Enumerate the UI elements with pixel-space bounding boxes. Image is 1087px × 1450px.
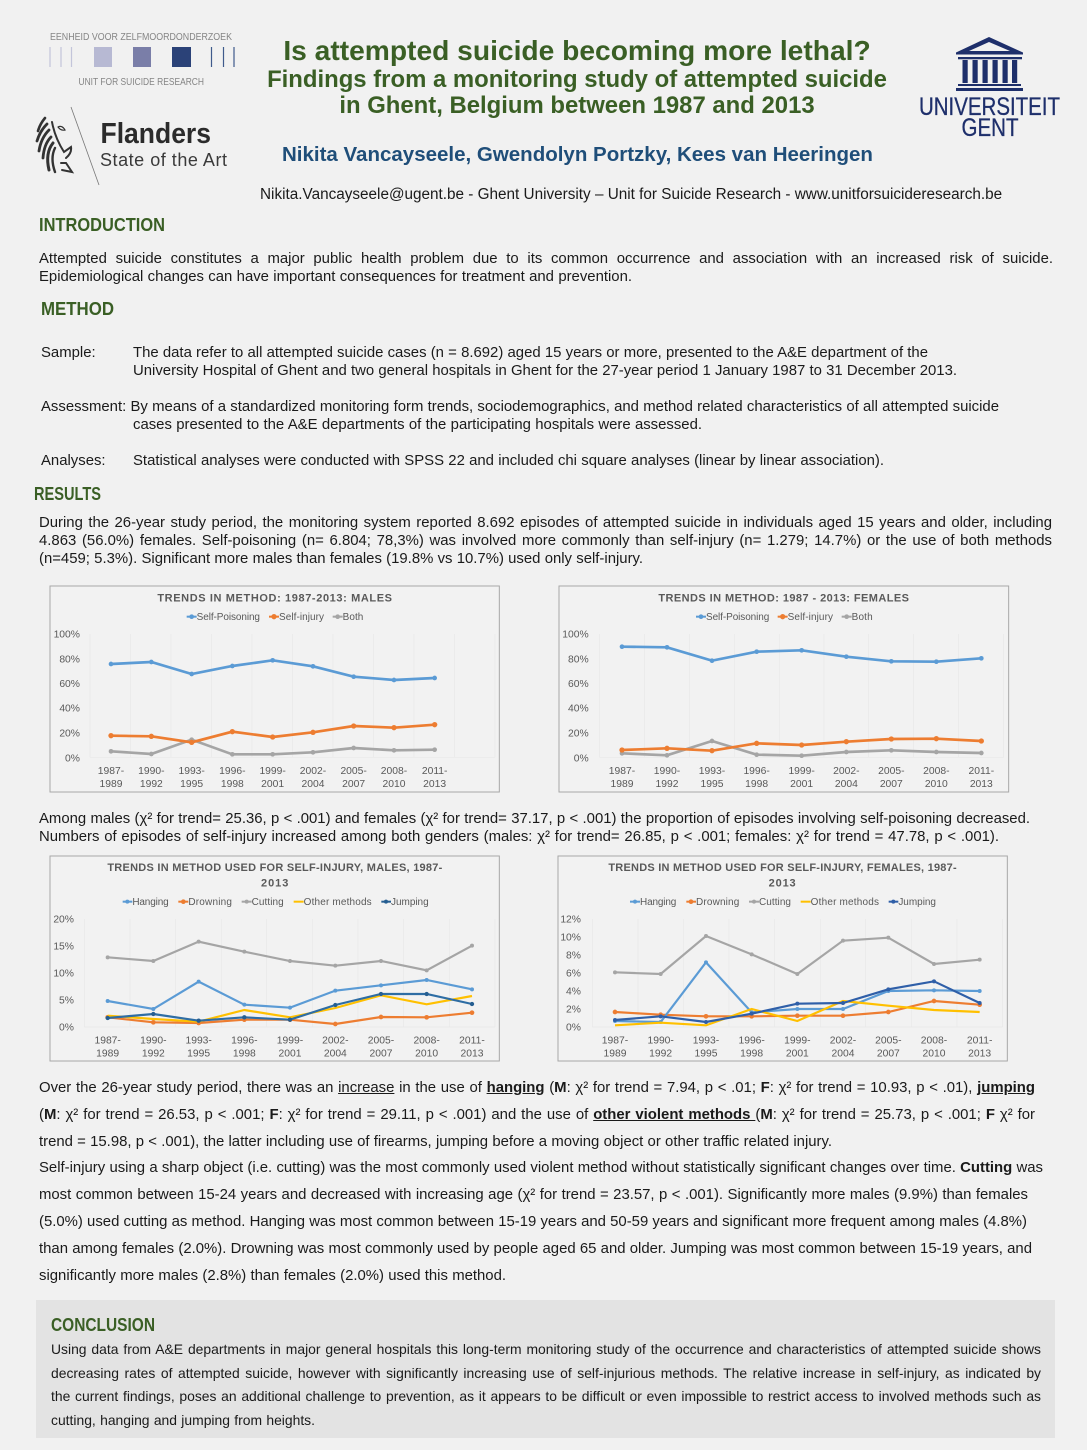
chart: self-injury methods, females: 2010: [923, 1048, 946, 1059]
chart: self-injury methods, males: 15%: [53, 942, 74, 953]
chart: trends in method, females: 1996-: [743, 766, 770, 777]
logo: unit for suicide research: EENHEID VOOR ZELFMOORDONDERZOEK: [50, 31, 232, 43]
chart: trends in method, males: 1990-: [138, 766, 165, 777]
chart: self-injury methods, males: 1998: [233, 1048, 256, 1059]
logo: Universiteit Gent: [919, 37, 1060, 142]
series: cutting: [106, 940, 474, 972]
series: drowning: [105, 1010, 474, 1026]
heading: conclusion: CONCLUSION: [51, 1315, 155, 1335]
text: conclusion: cutting, hanging and jumping from heights.: [51, 1412, 315, 1428]
series: both: [619, 739, 983, 758]
chart: trends in method, males: 1998: [221, 779, 244, 790]
chart: trends in method, males: 2008-: [381, 766, 407, 777]
chart: self-injury methods, males: 2010: [415, 1048, 438, 1059]
text: method findings over study period: most common between 15-24 years and decreased with increasing age (χ² for trend = 23.57, p < .001). Significantly more males (9.9%) than females: [39, 1187, 1028, 1203]
chart: self-injury methods, males: 5%: [59, 996, 74, 1007]
chart: self-injury methods, males: 2007: [370, 1048, 393, 1059]
logo: Flanders state of the art: Flanders: [100, 118, 211, 150]
text: method findings over study period: [39, 1080, 1043, 1284]
series: self-injury: [108, 722, 437, 745]
chart: self-injury methods, females: 2013: [968, 1048, 991, 1059]
chart: self-injury methods, males: 1989: [96, 1048, 119, 1059]
chart: self-injury methods, males: 1993-: [185, 1036, 212, 1047]
text: conclusion: the current findings, poses an additional challenge to prevention, as it appears to be difficult or even impossible to restrict access to involved methods such as: [51, 1388, 1041, 1404]
chart: trends in method, females: 2013: [969, 779, 993, 790]
chart: self-injury methods, males: 2001: [279, 1048, 302, 1059]
chart: trends in method, males: 20%: [59, 729, 80, 740]
text: method sample: University Hospital of Ghent and two general hospitals in Ghent for the 27-year period 1 January 1987 to 31 December 2013.: [133, 363, 957, 379]
text: method sample: Sample:: [41, 345, 96, 361]
chart: trends in method, males: 2005-: [340, 766, 367, 777]
chart: trends in method, females: 20%: [568, 729, 588, 740]
chart: self-injury methods, males: 1987-: [94, 1036, 121, 1047]
title: Is attempted suicide becoming more lethal?: [283, 34, 871, 66]
logo: unit for suicide research: [49, 31, 235, 88]
chart: trends in method, males: 2011-: [422, 766, 447, 777]
series: jumping: [613, 979, 982, 1024]
legend: Self-Poisoning: [706, 612, 769, 623]
chart: trends in method, males: 1993-: [178, 766, 205, 777]
chart: self-injury methods, females: 1992: [649, 1048, 672, 1059]
logo: unit for suicide research: UNIT FOR SUICIDE RESEARCH: [78, 76, 204, 88]
chart: self-injury methods, females: 2007: [877, 1048, 900, 1059]
legend: Drowning: [696, 897, 739, 908]
chart: trends in method, females: 80%: [568, 654, 588, 665]
chart: self-injury methods, females: 1989: [604, 1048, 627, 1059]
chart: self-injury methods, females: 1999-: [784, 1036, 811, 1047]
text: method findings over study period: Over the 26-year study period, there was an increase in the use of hanging (M: χ² for trend = 7.94, p < .01; F: χ² for trend = 10.93, p < .01), jumping: [39, 1080, 1035, 1096]
chart: trends in method, females: 1995: [700, 779, 723, 790]
chart: self-injury methods, females: TRENDS IN METHOD USED FOR SELF-INJURY, FEMALES, 1987-: [608, 862, 957, 874]
chart: trends in method, females: 40%: [568, 704, 588, 715]
affiliation line: Nikita.Vancayseele@ugent.be - Ghent University – Unit for Suicide Research - www.unitforsuicideresearch.be: [260, 186, 1002, 203]
legend: [187, 612, 363, 623]
chart: self-injury methods, females: 1998: [740, 1048, 763, 1059]
chart: trends in method, males: 0%: [65, 753, 80, 764]
chart: self-injury methods, males: 20%: [53, 915, 74, 926]
chart: self-injury methods, males: 1996-: [231, 1036, 258, 1047]
text: method findings over study period: than among females (2.0%). Drowning was most commonly used by people aged 65 and older. Jumping was most common between 15-19 years, and: [39, 1241, 1032, 1257]
chart: trends in method, males: 2013: [423, 779, 446, 790]
chart: self-injury methods, females: 6%: [566, 969, 581, 980]
heading: method: METHOD: [41, 299, 114, 319]
chart: self-injury methods, females: 2%: [566, 1005, 581, 1016]
text: method analyses: Analyses:: [41, 453, 106, 469]
heading: results: RESULTS: [34, 484, 101, 504]
legend: Both: [851, 612, 872, 623]
text: method assessment: Assessment: By means of a standardized monitoring form trends, sociodemographics, and method related characteristics of all attempted suicide: [41, 399, 999, 415]
legend: Drowning: [188, 897, 232, 908]
chart: trends in method, females: 0%: [573, 753, 588, 764]
chart: self-injury methods, females: 1990-: [647, 1036, 674, 1047]
chart: self-injury methods, males: TRENDS IN METHOD USED FOR SELF-INJURY, MALES, 1987-: [107, 862, 443, 874]
heading: introduction: INTRODUCTION: [39, 215, 165, 235]
legend: Self-injury: [279, 612, 324, 623]
chart: trends in method, males: 80%: [59, 654, 80, 665]
series: self-injury: [619, 736, 984, 753]
chart: self-injury methods, females: 2008-: [921, 1036, 947, 1047]
authors: Nikita Vancayseele, Gwendolyn Portzky, Kees van Heeringen: [282, 143, 873, 166]
chart: self-injury methods, females: 2011-: [967, 1036, 992, 1047]
chart: self-injury methods, males: 1990-: [140, 1036, 167, 1047]
chart: trends in method, males: 40%: [59, 704, 80, 715]
chart: self-injury methods, females: 1995: [695, 1048, 718, 1059]
chart: self-injury methods, males: 2013: [261, 878, 288, 890]
text: method findings over study period: (M: χ² for trend = 26.53, p < .001; F: χ² for trend = 29.11, p < .001) and the use of other violent methods (M: χ² for trend = 25.73, p < .001; F χ² for: [39, 1107, 1035, 1123]
text: method sample: The data refer to all attempted suicide cases (n = 8.692) aged 15 years or more, presented to the A&E department of the: [133, 345, 928, 361]
chart: trends in method, males: TRENDS IN METHOD: 1987-2013: MALES: [157, 593, 392, 605]
chart: trends in method, females: 1992: [655, 779, 678, 790]
text: results summary: (n=459; 5.3%). Significant more males than females (19.8% vs 10.7%) used only self-injury.: [39, 551, 643, 567]
chart: trends in method, males: 1992: [140, 779, 163, 790]
chart: self-injury methods, females: [558, 856, 1008, 1062]
chart: self-injury methods, females: 8%: [566, 951, 581, 962]
text: trend statistics: Among males (χ² for trend= 25.36, p < .001) and females (χ² for trend= 37.17, p < .001) the proportion of episodes involving self-poisoning decreased.: [39, 811, 1030, 827]
chart: trends in method, males: 2001: [261, 779, 284, 790]
text: conclusion: [51, 1341, 1041, 1428]
chart: self-injury methods, females: 10%: [560, 933, 581, 944]
chart: self-injury methods, males: 1995: [187, 1048, 210, 1059]
text: introduction: Epidemiological changes can have important consequences for treatment and prevention.: [39, 269, 632, 285]
series: drowning: [613, 999, 982, 1019]
chart: trends in method, females: 2011-: [968, 766, 994, 777]
chart: trends in method, females: 60%: [568, 679, 588, 690]
text: method findings over study period: trend = 15.98, p < .001), the latter including use of firearms, jumping before a moving object or other traffic related injury.: [39, 1134, 832, 1150]
legend: Self-injury: [787, 612, 833, 623]
text: introduction: Attempted suicide constitutes a major public health problem due to its common occurrence and association with an increased risk of suicide.: [39, 251, 1053, 267]
legend: [630, 897, 936, 908]
chart: self-injury methods, males: 0%: [59, 1023, 74, 1034]
series: jumping: [105, 992, 474, 1023]
title: [267, 34, 887, 119]
chart: self-injury methods, females: 2002-: [830, 1036, 856, 1047]
chart: trends in method, females: 1993-: [698, 766, 725, 777]
chart: trends in method, females: 2008-: [923, 766, 949, 777]
chart: self-injury methods, females: 12%: [560, 915, 581, 926]
chart: trends in method, females: 2001: [790, 779, 813, 790]
series: both: [109, 737, 437, 757]
series: other methods: [615, 1001, 980, 1025]
text: method findings over study period: Self-injury using a sharp object (i.e. cutting) was the most commonly used violent method without statistically significant changes over time. Cutting was: [39, 1160, 1043, 1176]
chart: self-injury methods, females: 2001: [786, 1048, 809, 1059]
text: trend statistics: Numbers of episodes of self-injury increased among both genders (males: χ² for trend= 26.85, p < .001; females: χ² for trend = 47.78, p < .001).: [39, 829, 999, 845]
chart: self-injury methods, males: 2005-: [368, 1036, 394, 1047]
chart: trends in method, females: 2005-: [878, 766, 904, 777]
chart: trends in method, males: 1996-: [219, 766, 246, 777]
text: results summary: During the 26-year study period, the monitoring system reported 8.692 episodes of attempted suicide in individuals aged 15 years and older, including: [39, 515, 1052, 531]
text: method findings over study period: (5.0%) used cutting as method. Hanging was most common between 15-19 years and 50-59 years and significant more frequent among males (4.8%): [39, 1214, 1027, 1230]
legend: Other methods: [811, 897, 879, 908]
text: method findings over study period: significantly more males (2.8%) than females (2.0%) used this method.: [39, 1268, 506, 1284]
chart: trends in method, males: 1999-: [259, 766, 286, 777]
chart: self-injury methods, males: 2008-: [413, 1036, 440, 1047]
series: hanging: [613, 960, 982, 1024]
chart: trends in method, females: 2004: [834, 779, 858, 790]
logo: Universiteit Gent: GENT: [962, 114, 1018, 142]
chart: trends in method, males: 1987-: [98, 766, 124, 777]
text: method assessment: [41, 399, 999, 433]
legend: Cutting: [759, 897, 791, 908]
chart: self-injury methods, females: 2013: [769, 878, 796, 890]
chart: trends in method, females: 1989: [610, 779, 633, 790]
chart: trends in method, females: 100%: [562, 630, 588, 641]
legend: Cutting: [252, 897, 284, 908]
chart: trends in method, males: 1989: [100, 779, 123, 790]
chart: trends in method, females: 1999-: [788, 766, 815, 777]
text: introduction: [39, 251, 1053, 285]
chart: self-injury methods, males: 2002-: [322, 1036, 349, 1047]
chart: trends in method, females: TRENDS IN METHOD: 1987 - 2013: FEMALES: [658, 593, 909, 605]
series: self-poisoning: [619, 644, 983, 664]
series: other methods: [108, 995, 472, 1022]
legend: Hanging: [132, 897, 169, 908]
legend: Self-Poisoning: [197, 612, 260, 623]
text: trend statistics: [39, 811, 1030, 845]
chart: self-injury methods, females: 4%: [566, 987, 581, 998]
chart: self-injury methods, males: 2011-: [459, 1036, 485, 1047]
logo: Flanders state of the art: State of the Art: [100, 150, 227, 170]
logo: Universiteit Gent: UNIVERSITEIT: [919, 93, 1060, 121]
chart: self-injury methods, males: 10%: [53, 969, 74, 980]
chart: self-injury methods, females: 2004: [832, 1048, 855, 1059]
text: method analyses: Statistical analyses were conducted with SPSS 22 and included chi square analyses (linear by linear association).: [133, 453, 884, 469]
chart: trends in method, males: 100%: [54, 630, 80, 641]
chart: trends in method, males: 2002-: [300, 766, 326, 777]
chart: self-injury methods, males: 2004: [324, 1048, 347, 1059]
series: hanging: [106, 978, 474, 1011]
chart: trends in method, males: 2007: [342, 779, 365, 790]
chart: trends in method, males: 2010: [383, 779, 406, 790]
chart: trends in method, females: 2007: [879, 779, 903, 790]
title: Findings from a monitoring study of attempted suicide: [267, 66, 887, 93]
chart: trends in method, females: 1987-: [608, 766, 635, 777]
text: conclusion: Using data from A&E departments in major general hospitals this long-term monitoring study of the occurrence and characteristics of attempted suicide shows: [51, 1341, 1041, 1357]
chart: self-injury methods, males: 1992: [142, 1048, 165, 1059]
text: results summary: [39, 515, 1052, 567]
text: method sample: [41, 345, 957, 379]
text: method assessment: cases presented to the A&E departments of the participating hospitals were assessed.: [133, 417, 702, 433]
chart: trends in method, males: 2004: [302, 779, 325, 790]
legend: Jumping: [898, 897, 936, 908]
series: self-poisoning: [109, 658, 437, 682]
chart: trends in method, males: 60%: [59, 679, 80, 690]
panel: conclusion: [36, 1300, 1055, 1438]
text: results summary: 4.863 (56.0%) females. Self-poisoning (n= 6.804; 78,3%) was involved more commonly than self-injury (n= 1.279; 14.7%) or the use of both methods: [39, 533, 1052, 549]
legend: Jumping: [391, 897, 429, 908]
chart: trends in method, females: 2002-: [833, 766, 859, 777]
legend: [123, 897, 429, 908]
chart: self-injury methods, females: 1987-: [602, 1036, 628, 1047]
chart: self-injury methods, females: 1996-: [738, 1036, 765, 1047]
series: cutting: [613, 934, 982, 976]
chart: trends in method, males: 1995: [180, 779, 203, 790]
text: conclusion: decreasing rates of attempted suicide, however with significantly increasing use of self-injurious methods. The relative increase in self-injury, as indicated by: [51, 1365, 1041, 1381]
legend: [696, 612, 872, 623]
chart: self-injury methods, females: 1993-: [693, 1036, 719, 1047]
chart: self-injury methods, males: 2013: [461, 1048, 484, 1059]
chart: self-injury methods, females: 0%: [566, 1023, 581, 1034]
legend: Other methods: [304, 897, 372, 908]
logo: Flanders state of the art: [36, 106, 227, 186]
legend: Both: [343, 612, 363, 623]
chart: trends in method, females: 1998: [745, 779, 768, 790]
chart: self-injury methods, females: 2005-: [875, 1036, 902, 1047]
chart: trends in method, females: [558, 586, 1010, 792]
chart: self-injury methods, males: [50, 856, 500, 1062]
chart: trends in method, females: 1990-: [653, 766, 680, 777]
title: in Ghent, Belgium between 1987 and 2013: [339, 92, 815, 119]
chart: self-injury methods, males: 1999-: [277, 1036, 303, 1047]
chart: trends in method, males: [50, 586, 500, 792]
chart: trends in method, females: 2010: [924, 779, 948, 790]
legend: Hanging: [640, 897, 676, 908]
